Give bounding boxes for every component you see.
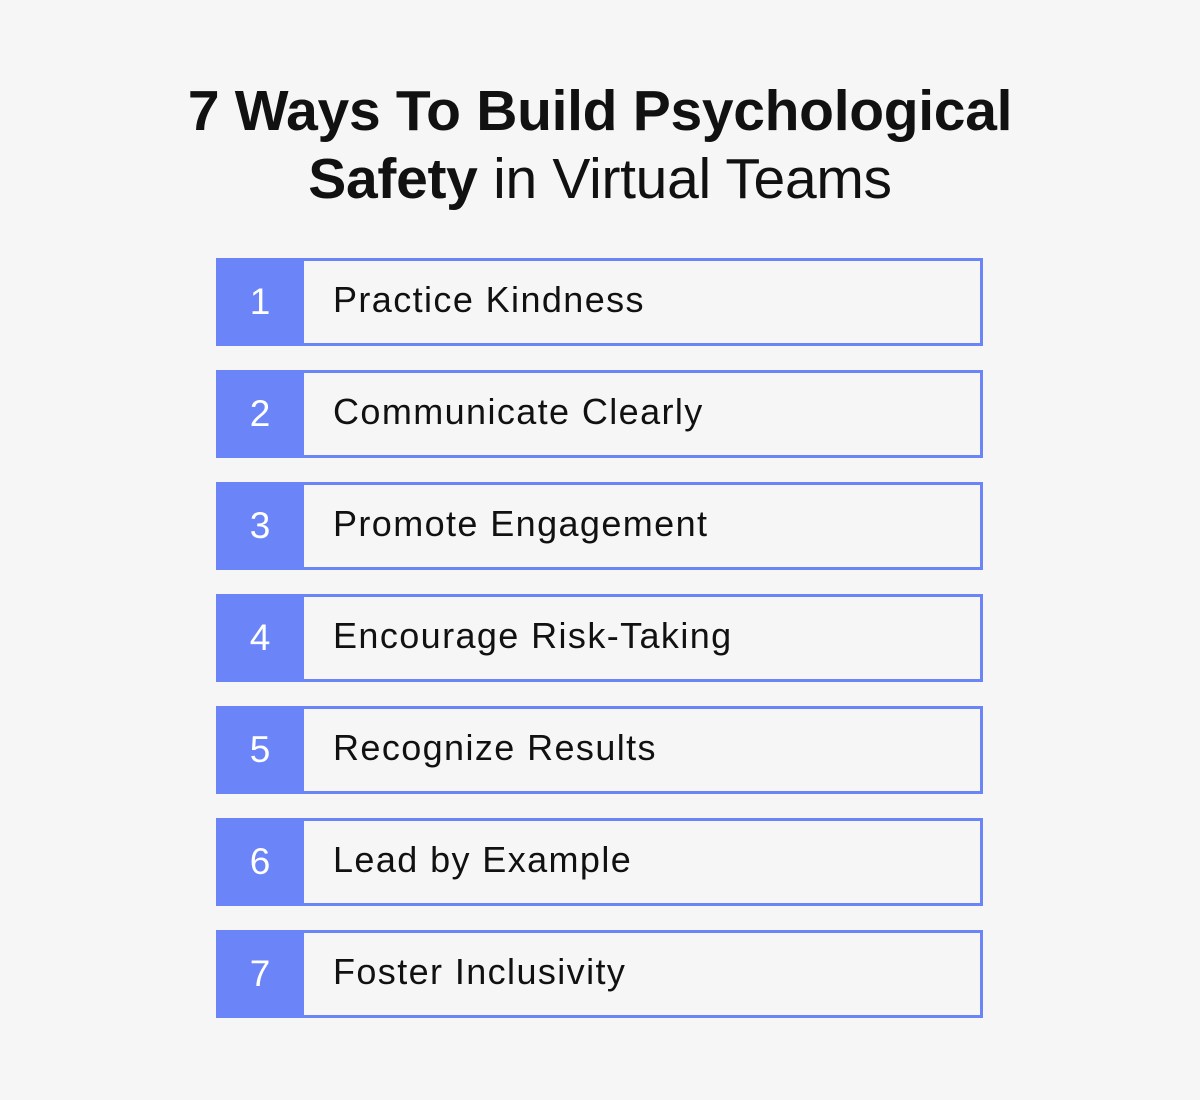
item 4 xyxy=(216,594,983,682)
item 4: Encourage Risk-Taking xyxy=(333,615,733,656)
item 7 xyxy=(216,930,983,1018)
item 7: Foster Inclusivity xyxy=(333,951,626,992)
item 3: 3 xyxy=(250,505,270,546)
title: Safety in Virtual Teams xyxy=(308,147,892,211)
item 3: Promote Engagement xyxy=(333,503,708,544)
item 6: Lead by Example xyxy=(333,839,632,880)
item 2 xyxy=(216,370,983,458)
item 6: 6 xyxy=(250,841,270,882)
item 3 xyxy=(216,482,983,570)
item 1: Practice Kindness xyxy=(333,279,645,320)
item 2: Communicate Clearly xyxy=(333,391,704,432)
item 6 xyxy=(216,818,983,906)
item 4: 4 xyxy=(250,617,270,658)
item 1 xyxy=(216,258,983,346)
title xyxy=(188,79,1012,211)
item 1: 1 xyxy=(250,281,270,322)
item 7: 7 xyxy=(250,953,270,994)
title: 7 Ways To Build Psychological xyxy=(188,79,1012,143)
item 5: Recognize Results xyxy=(333,727,657,768)
item 5: 5 xyxy=(250,729,270,770)
item 2: 2 xyxy=(250,393,270,434)
item 5 xyxy=(216,706,983,794)
